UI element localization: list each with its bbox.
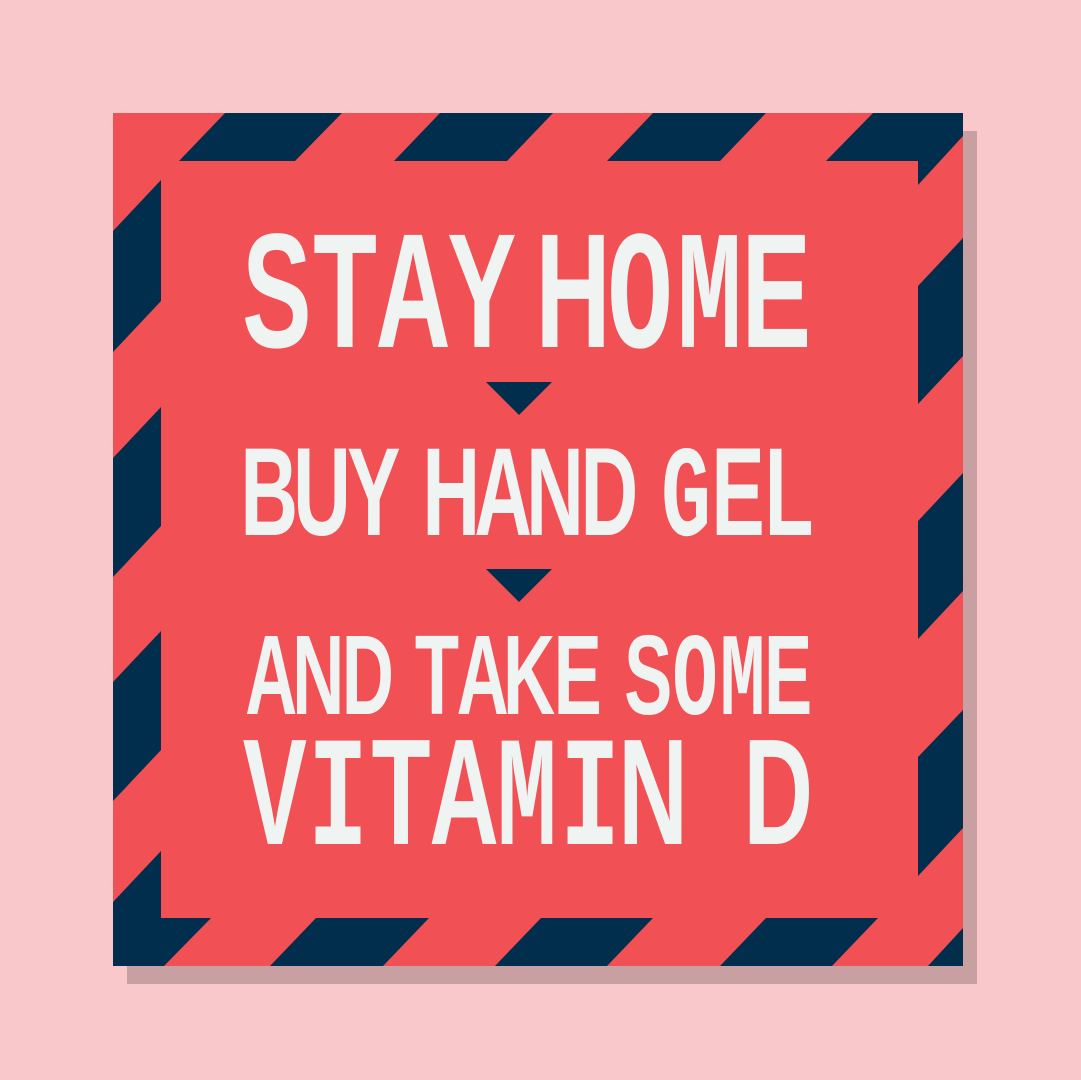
heading: stay home: STAY HOME <box>242 199 811 398</box>
airmail border stripes <box>113 113 963 966</box>
arrow: down triangle 1 <box>486 382 552 415</box>
card shadow <box>127 131 977 984</box>
panel: red card <box>113 113 963 966</box>
text: buy hand gel: BUY HAND GEL <box>240 423 813 574</box>
arrow: down triangle 2 <box>486 569 552 602</box>
text: vitamin d: VITAMIN D <box>243 707 813 892</box>
text: and take some: AND TAKE SOME <box>245 613 812 750</box>
